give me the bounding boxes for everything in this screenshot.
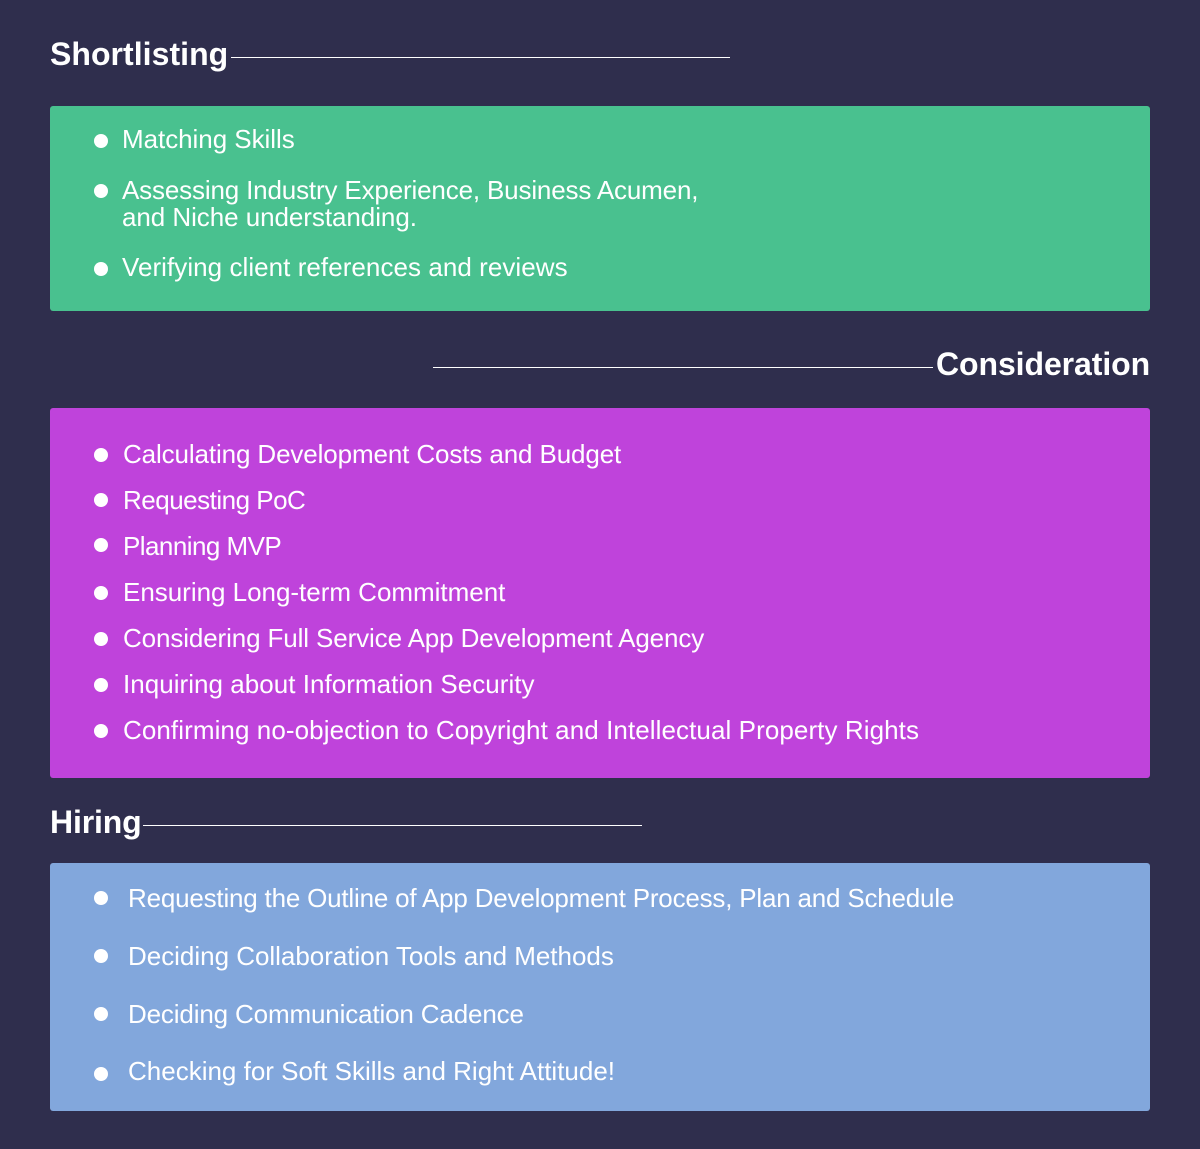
heading: Consideration: Consideration: [936, 346, 1150, 382]
list: Consideration items: Confirming no-objection to Copyright and Intellectual Property Rights: [123, 715, 919, 745]
list: Consideration items: Considering Full Service App Development Agency: [123, 623, 704, 653]
list: Hiring items: Requesting the Outline of App Development Process, Plan and Schedule: [128, 883, 954, 913]
list: Shortlisting items: and Niche understanding.: [122, 202, 417, 232]
list: Hiring items: Checking for Soft Skills and Right Attitude!: [128, 1056, 615, 1086]
heading: Shortlisting: Shortlisting: [50, 36, 228, 72]
panel: Shortlisting: [50, 106, 1150, 311]
list: Consideration items: Requesting PoC: [123, 485, 305, 515]
list: Consideration items: Planning MVP: [123, 531, 281, 561]
list: Shortlisting items: Assessing Industry Experience, Business Acumen,: [122, 175, 698, 205]
list: Shortlisting items: [94, 124, 698, 282]
panel: Hiring: [50, 863, 1150, 1111]
panel: Consideration: [50, 408, 1150, 778]
list: Consideration items: Calculating Development Costs and Budget: [123, 439, 621, 469]
list: Consideration items: Ensuring Long-term Commitment: [123, 577, 505, 607]
list: Hiring items: Deciding Communication Cadence: [128, 999, 524, 1029]
list: Shortlisting items: Matching Skills: [122, 124, 295, 154]
list: Shortlisting items: Verifying client references and reviews: [122, 252, 568, 282]
heading: Hiring: Hiring: [50, 804, 142, 840]
list: Consideration items: Inquiring about Information Security: [123, 669, 535, 699]
list: Consideration items: [94, 439, 919, 745]
list: Hiring items: Deciding Collaboration Tools and Methods: [128, 941, 614, 971]
list: Hiring items: [94, 883, 954, 1086]
